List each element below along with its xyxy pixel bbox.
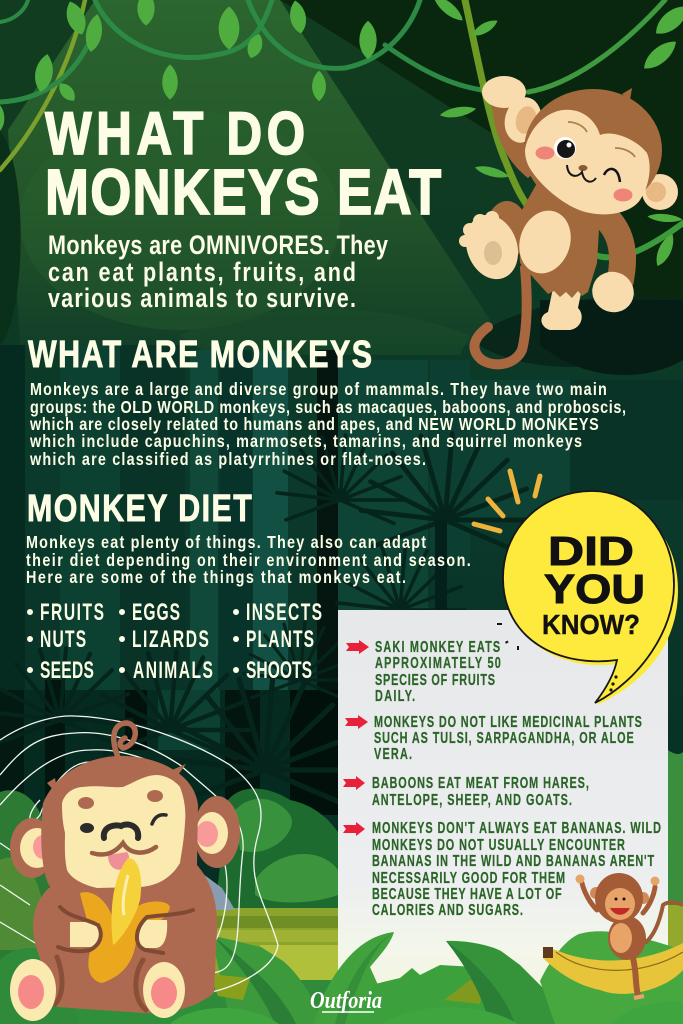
paragraph: what are monkeys: which are closely related to humans and apes, and NEW WORLD MONKEYS	[29, 415, 599, 434]
foreground banana leaves	[0, 931, 683, 1024]
paragraph: monkey diet: Here are some of the things that monkeys eat.	[26, 568, 406, 587]
speech bubble: did you know: YOU	[544, 566, 645, 612]
hands	[70, 922, 102, 947]
brows	[568, 122, 635, 157]
monkey hanging from vine	[457, 76, 678, 364]
food list: PLANTS	[246, 627, 314, 653]
monkey eating banana	[0, 716, 278, 1021]
panel: facts	[338, 610, 668, 1005]
light beam	[8, 0, 490, 345]
fact 1: SPECIES OF FRUITS	[375, 671, 495, 689]
vines and leaves	[0, 0, 683, 269]
icon: red arrow	[343, 822, 365, 836]
icon: red arrow	[346, 640, 369, 654]
mid mound	[345, 965, 500, 1024]
food list: NUTS	[40, 627, 86, 653]
fact 4: BECAUSE THEY HAVE A LOT OF	[372, 885, 562, 903]
left ear	[500, 93, 546, 147]
head	[637, 892, 649, 904]
title	[45, 99, 441, 228]
icon: red arrow	[343, 776, 365, 790]
body	[518, 183, 600, 298]
paragraph: monkey diet	[26, 533, 471, 587]
food list: SHOOTS	[246, 658, 312, 684]
right arm	[610, 222, 623, 282]
center leaf	[446, 941, 557, 1024]
fact 4: MONKEYS DON'T ALWAYS EAT BANANAS. WILD	[372, 819, 661, 837]
cheeks	[536, 146, 554, 160]
fact 4: NECESSARILY GOOD FOR THEM	[372, 869, 565, 887]
head and body	[33, 756, 217, 1013]
left bush	[0, 790, 55, 960]
intro text	[48, 231, 388, 314]
left tall leaf	[314, 932, 394, 1024]
nose	[104, 824, 138, 838]
left foot	[457, 207, 527, 287]
ears	[10, 818, 54, 878]
banana	[80, 892, 170, 983]
dark left leaf	[213, 936, 322, 1024]
palm silhouettes	[0, 434, 531, 804]
monkey on banana	[543, 873, 683, 998]
brows	[78, 797, 94, 809]
food list: FRUITS	[40, 600, 104, 626]
food list: INSECTS	[246, 600, 322, 626]
fact 2: VERA.	[374, 745, 412, 763]
body	[608, 916, 646, 960]
speech bubble: did you know: KNOW?	[542, 609, 640, 640]
feet	[55, 957, 146, 1010]
canopy blobs left	[0, 130, 21, 345]
paragraph: monkey diet: Monkeys eat plenty of things. They also can adapt	[26, 533, 427, 552]
burst marks	[474, 471, 540, 531]
speech bubble: did you know	[474, 471, 678, 705]
tail	[645, 902, 683, 943]
logo: Outforia	[310, 988, 382, 1014]
forest trunks	[0, 300, 683, 815]
gripping hand	[482, 76, 526, 108]
title: WHAT DO	[45, 99, 305, 167]
fact 1: APPROXIMATELY 50	[375, 654, 501, 672]
face	[62, 775, 185, 888]
mouth	[92, 843, 156, 855]
fact 4: BANANAS IN THE WILD AND BANANAS AREN'T	[372, 852, 655, 870]
tongue	[108, 852, 129, 870]
nose and smile	[578, 165, 588, 171]
fact 2: SUCH AS TULSI, SARPAGANDHA, OR ALOE	[374, 729, 634, 747]
arms	[582, 883, 597, 910]
fact 3: ANTELOPE, SHEEP, AND GOATS.	[372, 791, 572, 809]
tail	[474, 268, 527, 364]
face	[525, 110, 650, 214]
grass field	[205, 908, 340, 983]
food list: LIZARDS	[132, 627, 209, 653]
right bushes behind monkey	[215, 788, 340, 908]
speech bubble: did you know: DID	[548, 528, 634, 574]
banana	[543, 943, 683, 994]
right mound	[540, 931, 683, 1024]
belly	[511, 204, 579, 280]
fact 3: BABOONS EAT MEAT FROM HARES,	[372, 774, 589, 792]
right bush	[668, 750, 683, 905]
eye	[554, 137, 576, 159]
paragraph: what are monkeys: Monkeys are a large and diverse group of mammals. They have two main	[30, 380, 607, 399]
fact 2	[345, 713, 642, 763]
icon: red arrow	[345, 715, 368, 729]
intro text: can eat plants, fruits, and	[48, 258, 356, 288]
paragraph: what are monkeys: which are classified as platyrrhines or flat-noses.	[29, 450, 426, 469]
bottom mounds	[170, 1008, 279, 1024]
fact 1: DAILY.	[375, 687, 415, 705]
heading: what are monkeys: WHAT ARE MONKEYS	[28, 334, 372, 376]
fact 4: MONKEYS DO NOT USUALLY ENCOUNTER	[372, 836, 625, 854]
right hand	[585, 264, 641, 320]
tail curl	[114, 723, 135, 762]
title: MONKEYS EAT	[45, 157, 441, 228]
fact 1	[346, 638, 501, 705]
intro text: Monkeys are OMNIVORES. They	[48, 231, 388, 261]
food list: EGGS	[132, 600, 180, 626]
fact 1: SAKI MONKEY EATS	[375, 638, 500, 656]
food list: ANIMALS	[133, 658, 213, 684]
thigh	[486, 201, 528, 259]
heading: monkey diet: MONKEY DIET	[27, 488, 252, 530]
dark canopy top right	[280, 0, 683, 310]
intro text: various animals to survive.	[48, 284, 356, 314]
fact 4: CALORIES AND SUGARS.	[372, 901, 523, 919]
paragraph: what are monkeys: groups: the OLD WORLD monkeys, such as macaques, baboons, and proboscis,	[30, 398, 626, 417]
head	[524, 89, 662, 211]
food list: SEEDS	[40, 658, 94, 684]
contour lines	[0, 716, 278, 993]
paragraph: what are monkeys: which include capuchins, marmosets, tamarins, and squirrel monkeys	[29, 432, 582, 451]
lower foot	[541, 288, 582, 330]
paragraph: monkey diet: their diet depending on their environment and season.	[26, 551, 471, 570]
wink	[604, 169, 620, 182]
fact 2: MONKEYS DO NOT LIKE MEDICINAL PLANTS	[374, 713, 642, 731]
fact 4	[343, 819, 661, 919]
food list	[27, 600, 322, 684]
paragraph: what are monkeys	[29, 380, 626, 469]
eyes	[80, 823, 94, 833]
raised arm	[492, 100, 535, 178]
fact 3	[343, 774, 589, 809]
right ear	[642, 174, 678, 210]
